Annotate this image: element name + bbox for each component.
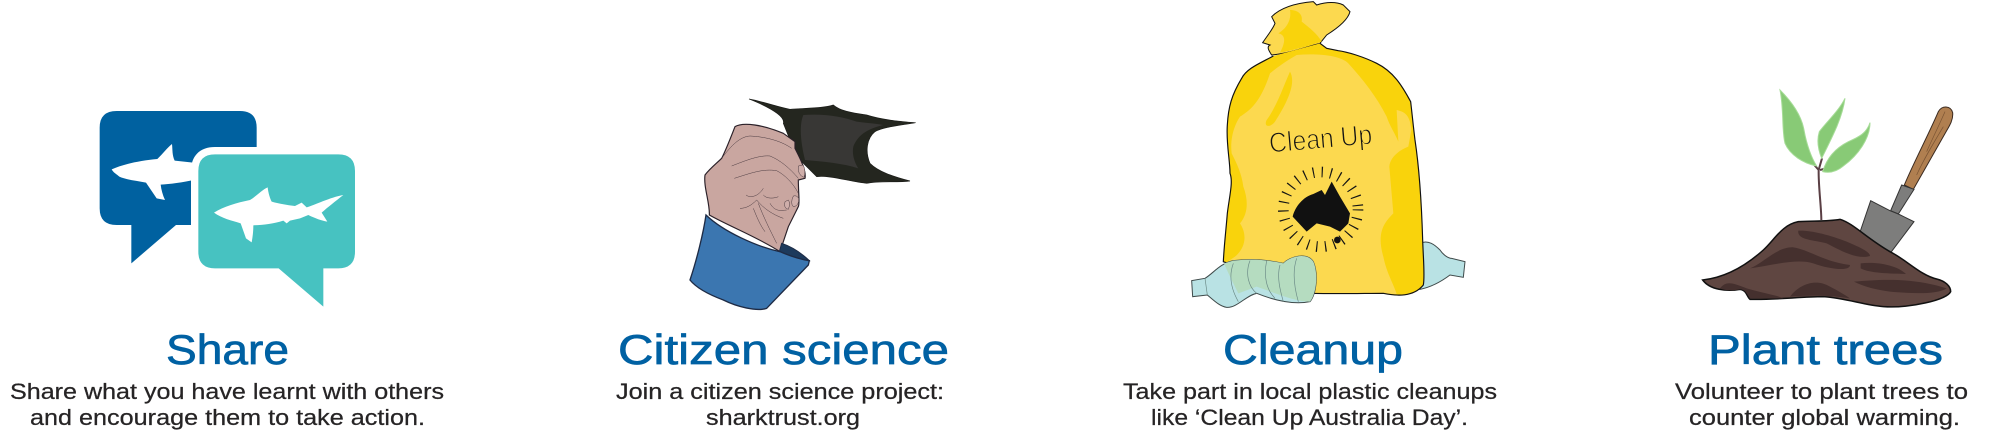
heading: cleanup: Cleanup [1223,326,1403,373]
icon: hand holding plastic [690,99,916,309]
panel: plant trees [1675,90,1968,430]
heading: citizen science: Citizen science [618,326,949,373]
panel: share [10,111,444,430]
icon: white shark in teal bubble [214,187,343,242]
icon: yellow rubbish bag with bottles [1192,2,1465,307]
icon: trowel [1859,107,1953,253]
icon: rear bottle [1420,242,1465,289]
text: share description: and encourage them to take action. [30,405,425,430]
text: cleanup description [1123,379,1497,430]
icon: blue speech bubble [100,111,257,263]
icon: bag knot [1263,2,1350,55]
icon: bag light area [1225,54,1411,294]
icon: soil mound [1703,219,1951,307]
icon: front bottle [1192,256,1316,307]
icon: seedling [1780,90,1870,220]
text: citizen science description: Join a citizen science project: [616,379,944,404]
text: cleanup description: like ‘Clean Up Australia Day’. [1151,405,1468,430]
text: citizen science description: sharktrust.org [706,405,860,430]
text: citizen science description [616,379,944,430]
text: cleanup description: Take part in local plastic cleanups [1123,379,1497,404]
icon: bag body [1223,43,1424,295]
text: share description [10,379,444,430]
panel: citizen science [616,99,949,430]
label: Clean Up on bag: Clean Up [1268,119,1373,159]
icon: white shark in blue bubble [112,144,200,200]
icon: teal speech bubble [198,154,355,307]
icon: seedling, soil and trowel [1703,90,1953,307]
text: plant trees description [1675,379,1968,430]
text: plant trees description: counter global warming. [1689,405,1960,430]
icon: dark plastic [749,99,916,183]
panel: cleanup [1123,2,1497,430]
icon: blue sleeve cuff [779,243,809,261]
text: share description: Share what you have learnt with others [10,379,444,404]
heading: share: Share [166,326,289,373]
icon: bag outline [1223,43,1424,295]
icon: Australia map with rays [1283,172,1358,247]
text: plant trees description: Volunteer to plant trees to [1675,379,1968,404]
icon: speech bubbles with sharks [100,111,355,307]
icon: fist [705,124,805,252]
heading: plant trees: Plant trees [1708,326,1943,373]
